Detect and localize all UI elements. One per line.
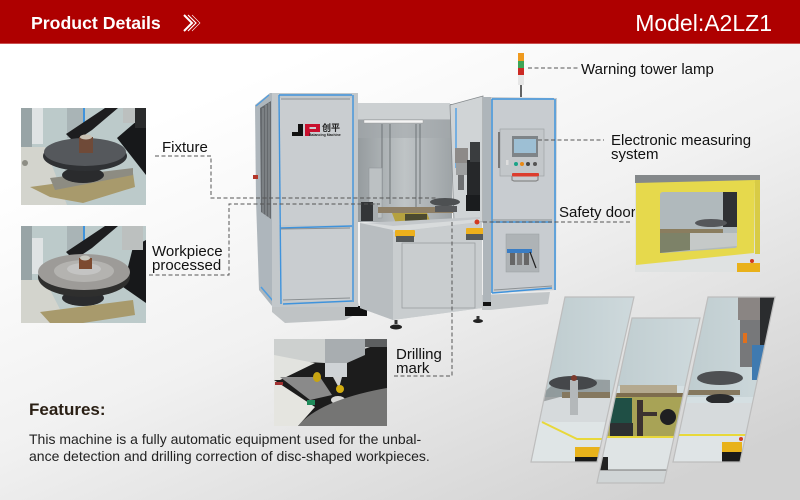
label: electronic measuring system: system <box>611 146 659 163</box>
label: fixture: Fixture <box>162 139 208 156</box>
left cabinet side <box>255 93 278 306</box>
label: safety door: Safety door <box>559 204 636 221</box>
panel: left collage <box>530 297 640 462</box>
light bar <box>364 120 423 123</box>
right cabinet <box>483 97 491 302</box>
heading: product details: Product Details <box>31 13 161 33</box>
machine base <box>272 302 360 323</box>
features description: This machine is a fully automatic equipment used for the unbal- <box>29 431 422 447</box>
photo: drilling mark <box>274 339 387 426</box>
model heading: Model:A2LZ1 <box>635 10 772 36</box>
control panel <box>498 129 544 181</box>
yellow buttons <box>395 230 415 237</box>
feet <box>394 320 398 324</box>
air filter unit <box>506 234 539 272</box>
label: drilling mark: Drilling <box>396 346 442 363</box>
left cabinet front <box>272 93 358 307</box>
logo <box>292 122 341 137</box>
photo: fixture <box>21 108 146 205</box>
machine illustration <box>253 53 557 330</box>
photo: workpiece processed <box>21 226 146 323</box>
warning tower lamp <box>518 53 524 97</box>
logo: Balancing Machine <box>309 133 341 137</box>
front table <box>360 217 482 320</box>
label: electronic measuring system: Electronic measuring <box>611 132 751 149</box>
features description: ance detection and drilling correction of disc-shaped workpieces. <box>29 448 430 464</box>
inner chamber <box>357 104 452 222</box>
logo: 创平 <box>322 122 340 133</box>
drill head <box>455 142 480 211</box>
photo: safety door <box>635 175 760 272</box>
leader lines <box>149 68 630 376</box>
panel: middle collage <box>595 318 705 483</box>
heading: features: Features: <box>29 400 106 419</box>
label: drilling mark: mark <box>396 360 430 377</box>
header band <box>0 0 800 44</box>
panel: right collage <box>670 297 780 462</box>
photo collage <box>530 297 780 483</box>
label: warning tower lamp: Warning tower lamp <box>581 61 714 78</box>
turntable <box>361 198 460 226</box>
label: workpiece processed: processed <box>152 257 221 274</box>
icon: chevrons <box>184 15 200 31</box>
right door frame <box>450 96 483 222</box>
label: workpiece processed: Workpiece <box>152 243 223 260</box>
